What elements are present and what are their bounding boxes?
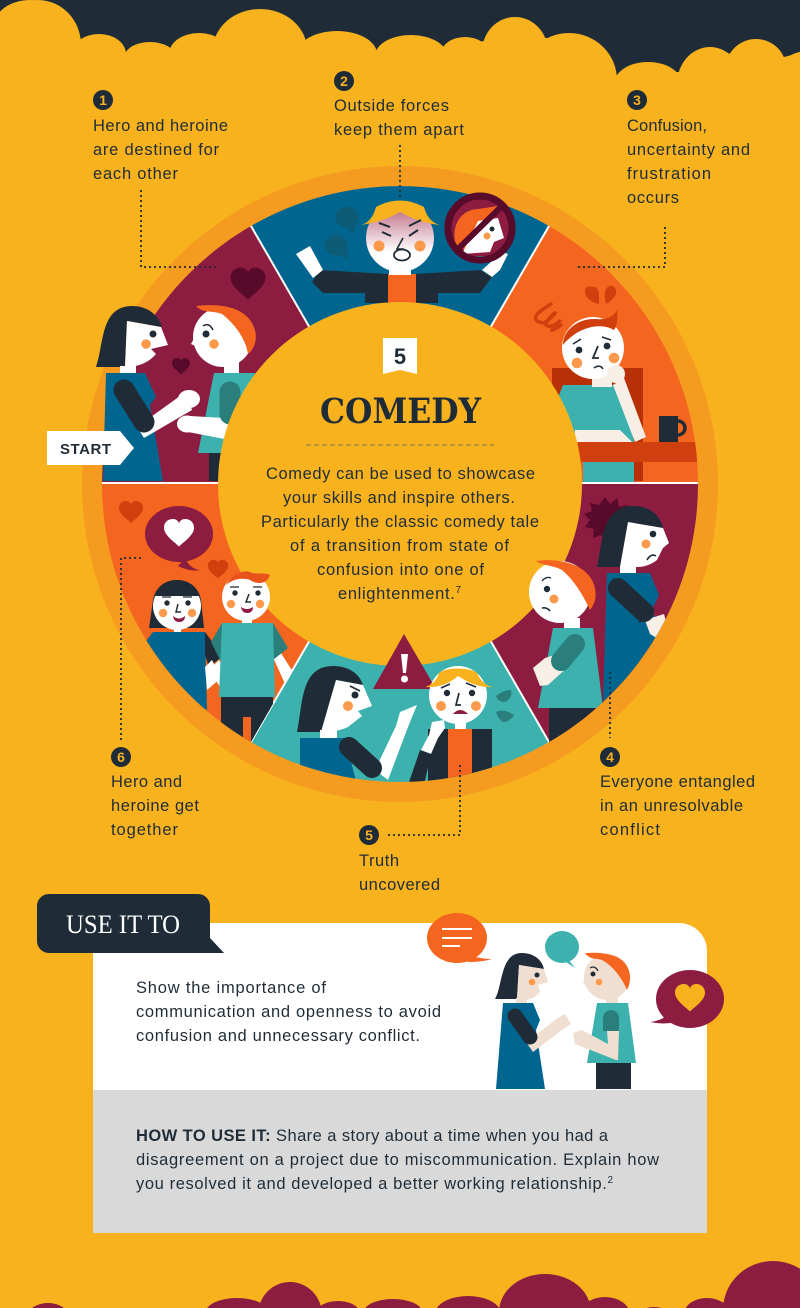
orange speech bubble <box>427 913 492 963</box>
sweat drops <box>496 690 514 722</box>
divider lines <box>102 226 698 742</box>
big heart <box>231 268 265 300</box>
left hand <box>296 246 323 278</box>
step 6 label: together <box>111 821 178 839</box>
step 5 label: Truth <box>359 852 399 870</box>
segment 2 background <box>251 186 549 484</box>
heading: COMEDY <box>320 391 482 432</box>
maroon heart bubble <box>650 970 724 1028</box>
step 2 label <box>334 71 464 198</box>
squiggle icon <box>536 304 561 330</box>
step 6 label: heroine get <box>111 797 199 815</box>
step 4 label: conflict <box>600 821 660 839</box>
use it text <box>136 979 441 1045</box>
step 6 label: 6 <box>117 749 125 765</box>
how to use text: disagreement on a project due to miscommunication. Explain how <box>136 1151 659 1169</box>
mug <box>659 416 685 442</box>
heroine back <box>597 506 669 702</box>
step 1 label: each other <box>93 165 178 183</box>
teal speech bubble <box>545 931 579 968</box>
number badge <box>383 338 417 374</box>
start tag: START <box>60 441 111 458</box>
heroine <box>96 306 200 481</box>
step 3 label: occurs <box>627 189 679 207</box>
step 2 label: Outside forces <box>334 97 449 115</box>
arms and jacket <box>312 270 492 303</box>
description: of a transition from state of <box>290 537 509 555</box>
segment 4 illustration: entangled conflict <box>529 497 669 760</box>
step 3 label: 3 <box>633 92 641 108</box>
dashed rule <box>306 444 494 446</box>
step 5 label: uncovered <box>359 876 440 894</box>
how to use text: HOW TO USE IT: Share a story about a time when you had a <box>136 1127 609 1145</box>
top clouds <box>0 0 800 127</box>
segment 1 background <box>102 226 400 484</box>
segment 4 background <box>400 484 698 742</box>
center circle <box>218 302 582 666</box>
man talking <box>573 953 636 1089</box>
segment 1 illustration: destined couple <box>96 268 265 481</box>
segment 6 background <box>102 484 400 742</box>
hero back <box>529 560 603 760</box>
step 3 label: Confusion, <box>627 117 707 135</box>
hero surprised <box>408 666 514 790</box>
segment 5 background <box>251 484 549 782</box>
step 4 label: 4 <box>606 749 614 765</box>
segment 6 illustration: couple together <box>119 501 293 747</box>
step 5 label: 5 <box>365 827 373 843</box>
bottom clouds <box>28 1261 800 1308</box>
use it text: communication and openness to avoid <box>136 1003 441 1021</box>
step 1 label: 1 <box>99 92 107 108</box>
segment 3 background <box>400 226 698 484</box>
step 4 label <box>600 672 755 839</box>
step 3 label <box>578 90 750 267</box>
heroine <box>146 580 223 710</box>
step 1 label: are destined for <box>93 141 220 159</box>
description: Comedy can be used to showcase <box>266 465 535 483</box>
number badge: 5 <box>394 344 406 369</box>
description: enlightenment. <box>338 585 455 603</box>
heart speech bubble <box>145 506 213 570</box>
thought bubble upper <box>335 206 359 235</box>
head <box>562 310 624 387</box>
wheel outer ring <box>82 166 718 802</box>
table <box>578 442 697 462</box>
step 3 label: frustration <box>627 165 711 183</box>
warning triangle <box>373 634 436 689</box>
step 2 label: 2 <box>340 73 348 89</box>
white card <box>93 923 707 1090</box>
hero <box>209 571 293 747</box>
arm and hand <box>575 365 646 442</box>
chair <box>552 368 643 481</box>
step 2 label: keep them apart <box>334 121 464 139</box>
description: your skills and inspire others. <box>283 489 515 507</box>
use it to tab <box>37 894 224 953</box>
segment 5 illustration: truth uncovered <box>297 634 514 790</box>
description: Particularly the classic comedy tale <box>261 513 539 531</box>
panel: use it to <box>37 894 724 1233</box>
step 6 label <box>111 558 199 839</box>
heart left <box>119 501 143 523</box>
description <box>261 465 539 603</box>
prohibited heroine sign <box>448 196 512 260</box>
how to use text: you resolved it and developed a better working relationship. <box>136 1175 607 1193</box>
anger burst icon <box>584 497 628 538</box>
hero <box>177 305 256 481</box>
step 4 label: Everyone entangled <box>600 773 755 791</box>
use it text: confusion and unnecessary conflict. <box>136 1027 420 1045</box>
step 5 label <box>359 765 460 894</box>
segment 2 illustration: outside forces <box>296 196 512 304</box>
how to use panel <box>93 1090 707 1233</box>
story wheel <box>82 166 718 802</box>
step 3 label: uncertainty and <box>627 141 750 159</box>
use it text: Show the importance of <box>136 979 326 997</box>
heart right <box>208 560 228 578</box>
woman talking <box>495 953 571 1089</box>
use it to tab: USE IT TO <box>66 910 180 939</box>
how to use text: 2 <box>607 1175 613 1186</box>
description: confusion into one of <box>317 561 484 579</box>
torso <box>558 385 634 442</box>
thought bubble lower <box>324 234 349 260</box>
step 1 label <box>93 90 228 267</box>
right hand <box>482 252 508 277</box>
heroine pointing <box>297 666 417 785</box>
description: 7 <box>455 585 461 596</box>
start tag <box>47 431 134 465</box>
segment 3 illustration: confused hero at table <box>536 286 697 482</box>
step 1 label: Hero and heroine <box>93 117 228 135</box>
broken heart icon <box>585 286 616 304</box>
how to use text <box>136 1127 659 1193</box>
shirt <box>388 274 416 304</box>
small heart <box>172 358 190 374</box>
step 4 label: in an unresolvable <box>600 797 743 815</box>
angry head <box>361 200 440 275</box>
step 6 label: Hero and <box>111 773 182 791</box>
